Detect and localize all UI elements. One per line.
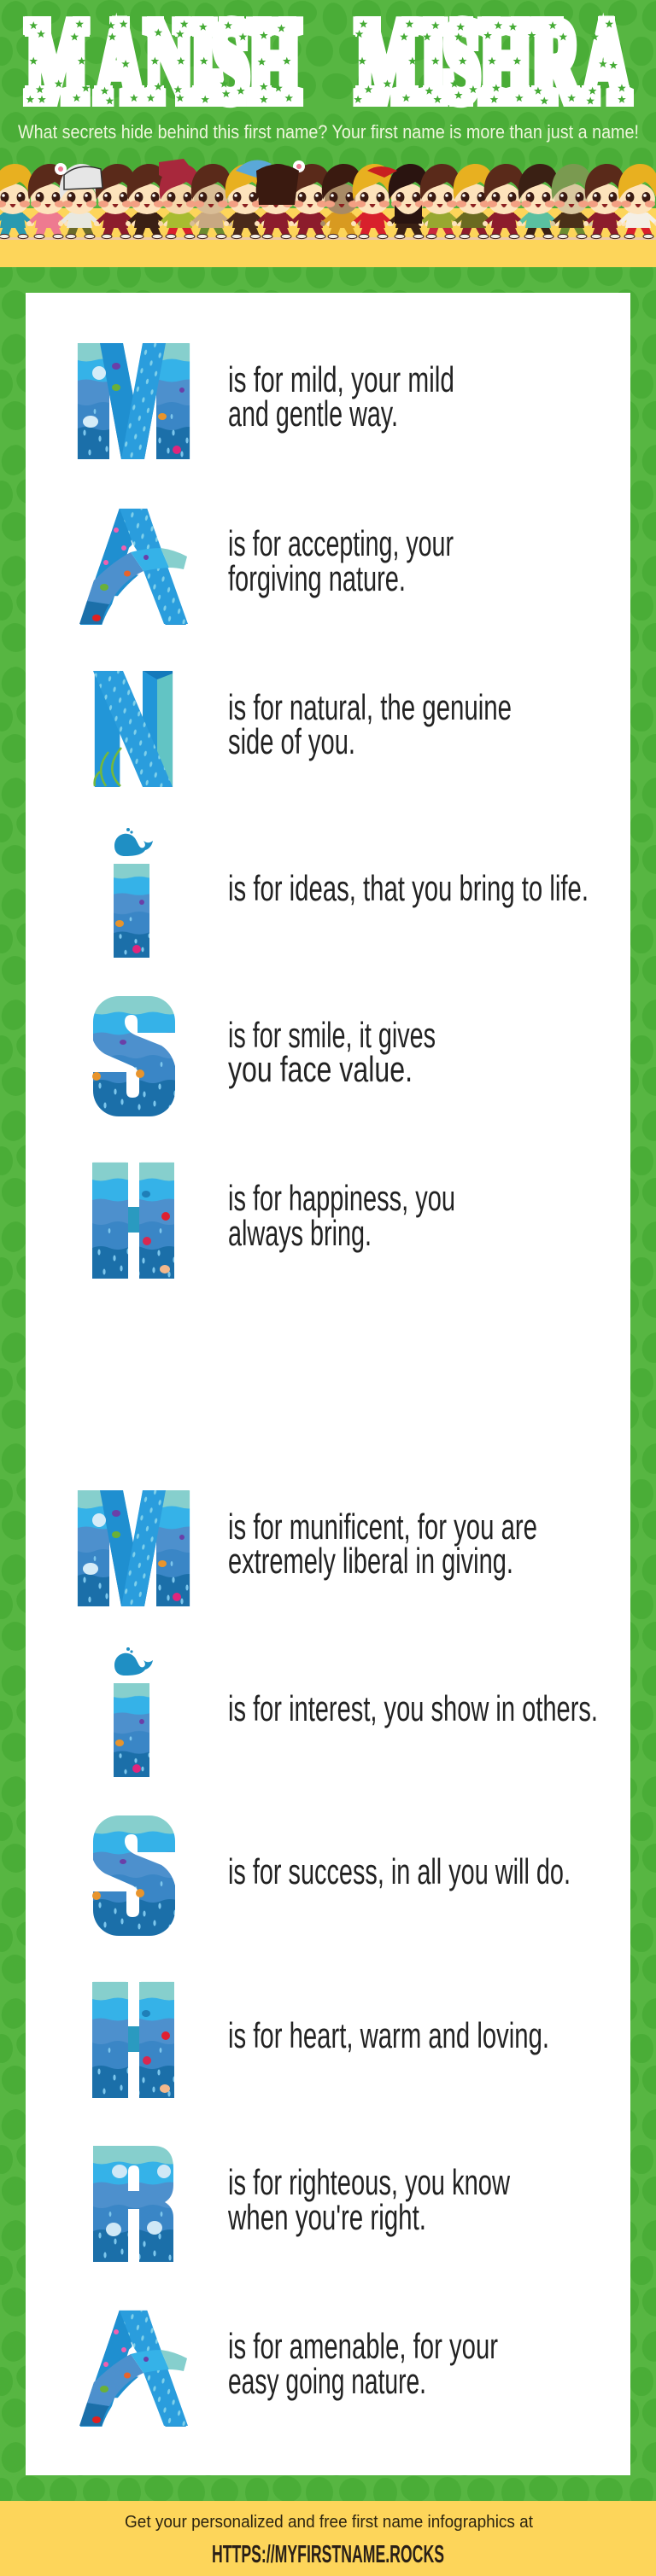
row: H is for heart xyxy=(92,1963,549,2116)
description: side of you. xyxy=(228,721,355,761)
ground strip xyxy=(0,237,656,240)
description: is for amenable, for your xyxy=(228,2326,498,2366)
row: S is for success xyxy=(86,1796,571,1956)
letter R: R xyxy=(96,2125,167,2283)
description xyxy=(227,2162,510,2237)
description: when you're right. xyxy=(227,2197,426,2237)
description: you face value. xyxy=(228,1049,413,1089)
row: M is for mild xyxy=(72,313,454,488)
description xyxy=(228,523,454,598)
description: is for smile, it gives xyxy=(228,1015,436,1055)
row: A is for accepting xyxy=(79,475,454,658)
letter M: M xyxy=(72,313,196,488)
letter N: N xyxy=(92,645,175,812)
description: is for mild, your mild xyxy=(228,359,454,399)
letter M: M xyxy=(72,1460,196,1635)
row: S is for smile xyxy=(86,976,436,1137)
description: is for natural, the genuine xyxy=(228,687,512,727)
parade of children characters xyxy=(0,159,656,239)
letter A: A xyxy=(79,2276,188,2460)
description: forgiving nature. xyxy=(228,558,406,598)
footer band xyxy=(0,2501,656,2576)
letter H: H xyxy=(95,1144,173,1297)
row: M is for munificent xyxy=(72,1460,537,1635)
description xyxy=(228,687,512,761)
row: A is for amenable xyxy=(79,2276,498,2460)
letter S: S xyxy=(97,1796,172,1956)
title: MANISH xyxy=(26,0,300,124)
title: MISHRA xyxy=(356,0,630,124)
letter S: S xyxy=(97,976,172,1137)
description: is for righteous, you know xyxy=(228,2162,510,2202)
footer text: Get your personalized and free first name infographics at xyxy=(125,2513,533,2532)
description: extremely liberal in giving. xyxy=(228,1541,513,1581)
description: is for happiness, you xyxy=(228,1178,455,1218)
letter I: I xyxy=(112,1661,157,1799)
letter H: H xyxy=(95,1963,173,2116)
row: R is for righteous xyxy=(93,2125,510,2283)
description xyxy=(228,1507,537,1581)
description: easy going nature. xyxy=(228,2361,426,2401)
icon: whale xyxy=(114,1647,153,1676)
description: and gentle way. xyxy=(228,393,398,434)
white content panel xyxy=(26,293,630,2475)
description xyxy=(228,1015,436,1089)
row: I is for interest xyxy=(112,1647,598,1799)
description: is for accepting, your xyxy=(228,523,454,563)
title xyxy=(25,0,630,124)
icon: whale xyxy=(114,828,153,856)
description: always bring. xyxy=(228,1213,372,1253)
row: N is for natural xyxy=(92,645,512,812)
row: H is for happiness xyxy=(92,1144,455,1297)
description xyxy=(228,2326,498,2401)
row: I is for ideas xyxy=(112,828,589,980)
yellow band xyxy=(0,208,656,267)
description xyxy=(228,1178,455,1253)
letter I: I xyxy=(112,842,157,980)
footer url: HTTPS://MYFIRSTNAME.ROCKS xyxy=(212,2541,444,2568)
description xyxy=(228,359,454,434)
letter A: A xyxy=(79,475,188,658)
